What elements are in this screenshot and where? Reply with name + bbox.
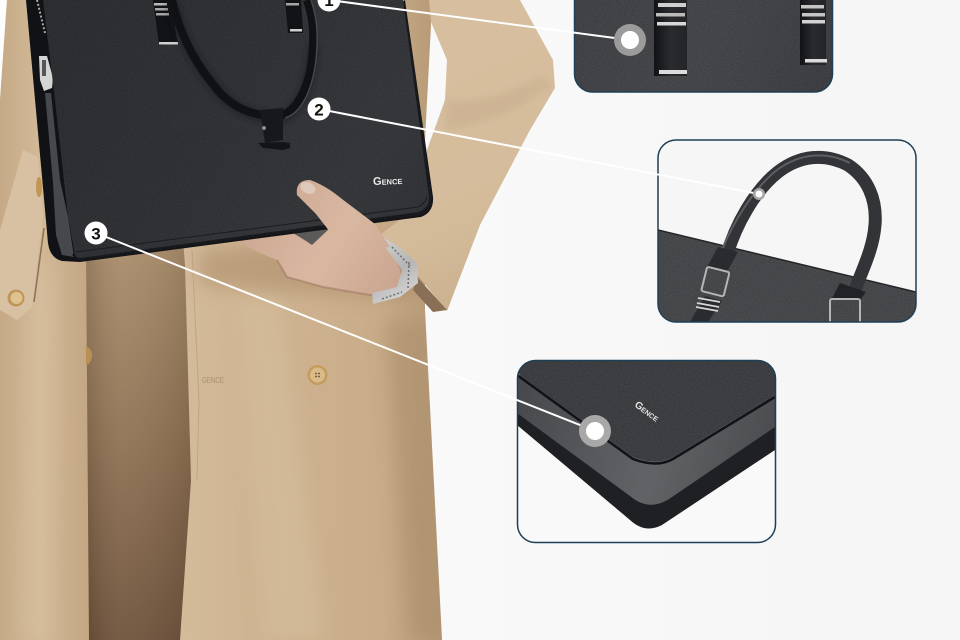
number badge 1 <box>318 0 340 12</box>
buckle: left <box>696 247 738 311</box>
handle loop <box>172 0 313 116</box>
number badge 3 <box>84 222 108 244</box>
briefcase rim <box>72 0 433 262</box>
button: coat front <box>308 365 328 385</box>
target marker 3 <box>579 415 611 447</box>
target marker 1 <box>614 24 646 56</box>
strap: left <box>153 0 178 45</box>
leader line 1 <box>329 0 630 40</box>
pocket flap <box>0 150 44 320</box>
logo: GENCE: GENCE <box>632 400 661 425</box>
strap: right <box>285 0 303 33</box>
hand gap between fingers <box>293 228 330 245</box>
target marker 2 <box>753 188 765 200</box>
leader line 2 <box>319 109 759 194</box>
coat embroidered label: GENCE <box>202 376 224 385</box>
briefcase front face <box>43 0 429 258</box>
zipper <box>37 0 53 91</box>
coat front opening shadow <box>86 240 191 640</box>
button: behind flap <box>36 177 42 197</box>
sleeve <box>380 0 555 312</box>
number badge 3: 3 <box>91 224 101 244</box>
handle tab <box>258 108 290 150</box>
handle arc <box>726 157 875 290</box>
handle highlight <box>285 0 317 118</box>
callout 3 <box>84 222 611 447</box>
flap shadow edge <box>34 228 44 302</box>
sleeve lining cuff <box>413 277 447 312</box>
coat drape folds <box>196 243 442 637</box>
handle shadow <box>172 0 313 118</box>
base layer <box>517 405 775 529</box>
hand <box>240 225 402 295</box>
strap: right detail <box>800 0 827 65</box>
thumbnail <box>298 180 318 196</box>
sleeve crease shadow <box>445 76 552 130</box>
thumb over bag <box>297 180 390 250</box>
number badge 2: 2 <box>314 100 324 120</box>
callout 1 <box>318 0 646 56</box>
number badge 2 <box>308 98 330 120</box>
top face <box>517 360 775 462</box>
button: half hidden <box>86 346 92 365</box>
buckle: right <box>829 283 866 322</box>
coat body <box>0 0 442 640</box>
panel 2: handle detail <box>658 140 916 327</box>
hand shadow edge <box>277 260 397 295</box>
briefcase <box>26 0 435 262</box>
callout 2 <box>308 98 765 200</box>
trench coat <box>0 0 445 640</box>
bag top surface <box>658 230 916 322</box>
coat placket seam <box>192 250 199 480</box>
strap: left <box>690 296 722 322</box>
logo: GENCE: GENCE <box>373 175 403 188</box>
wristwatch <box>372 237 418 304</box>
side wall <box>517 375 775 505</box>
briefcase side strip <box>45 93 74 257</box>
briefcase back and side <box>26 0 80 262</box>
zip trim <box>517 375 775 464</box>
panel 1: strap hardware detail <box>574 0 834 92</box>
coat left panel <box>0 0 90 640</box>
strap: left detail <box>654 0 687 76</box>
panel 3: corner detail <box>517 360 776 542</box>
briefcase stitched edge <box>76 197 427 252</box>
leader line 3 <box>96 233 595 431</box>
button: pocket <box>8 290 24 306</box>
